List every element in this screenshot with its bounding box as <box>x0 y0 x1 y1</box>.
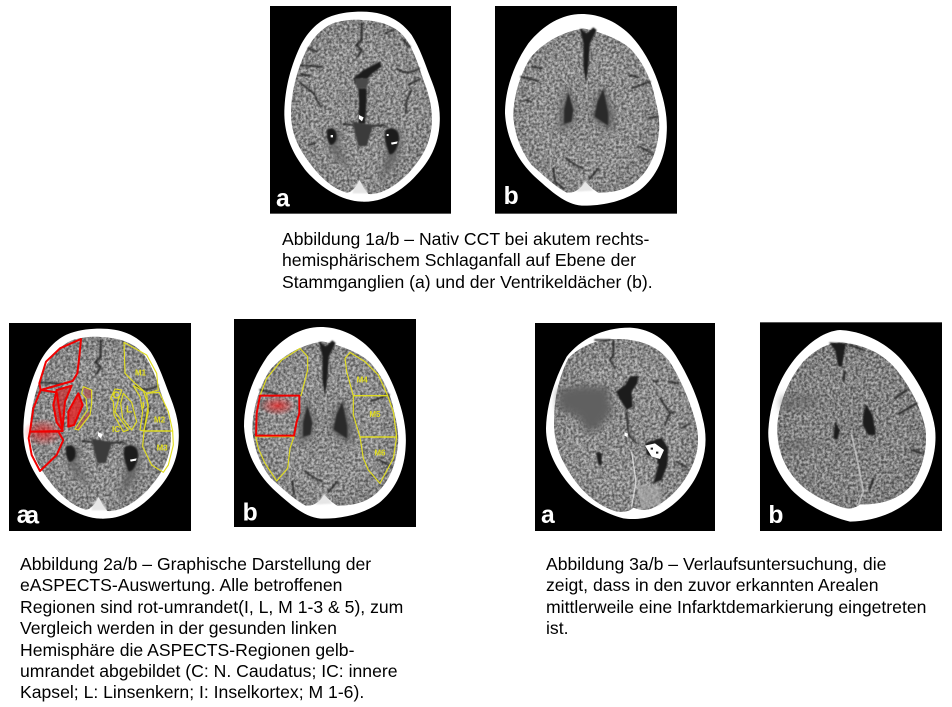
caption figure 3: Abbildung 3a/b – Verlaufsuntersuchung, die <box>546 554 886 574</box>
red outline M1 <box>39 339 81 390</box>
caption figure 2: Abbildung 2a/b – Graphische Darstellung der <box>20 554 371 574</box>
figure 3a: follow-up CT basal ganglia level <box>535 323 715 531</box>
caption figure 2: Regionen sind rot-umrandet(I, L, M 1-3 & 5), zum <box>20 597 403 617</box>
yellow ASPECTS regions left hemisphere: IC <box>112 425 120 434</box>
scan 2b <box>244 327 406 519</box>
red outline insula <box>53 386 72 430</box>
caption figure 1 <box>282 229 653 292</box>
brain 1a <box>291 20 432 194</box>
caption figure 1: Abbildung 1a/b – Nativ CCT bei akutem rechts- <box>282 229 649 249</box>
red outline M2 and M3 <box>29 390 63 471</box>
label b: b <box>504 183 519 210</box>
caption figure 2: Kapsel; L: Linsenkern; I: Inselkortex; M 1-6). <box>20 682 364 702</box>
scan 2a <box>23 329 179 519</box>
label b: b <box>243 499 258 526</box>
brain 3a <box>554 339 698 512</box>
yellow ASPECTS regions left hemisphere <box>111 342 173 472</box>
caption figure 1: hemisphärischem Schlaganfall auf Ebene der <box>282 250 636 270</box>
red outline M5 right hemisphere <box>256 396 299 436</box>
ventricles and sulci 3b <box>829 342 922 505</box>
figure 3b: follow-up CT ventricle roof level <box>760 322 942 531</box>
yellow ASPECTS regions left hemisphere: M3 <box>157 444 168 453</box>
ventricles and sulci 1a <box>300 23 419 193</box>
caption figure 2: umrandet abgebildet (C: N. Caudatus; IC: innere <box>20 661 398 681</box>
yellow regions M4 M5 M6 both hemispheres: M6 <box>374 449 386 458</box>
red outline lentiform nucleus <box>68 393 83 427</box>
yellow regions M4 M5 M6 both hemispheres <box>256 348 397 483</box>
label a: a <box>276 186 290 213</box>
caption figure 3: mittlerweile eine Infarktdemarkierung eingetreten <box>546 597 926 617</box>
label a: a <box>541 502 555 529</box>
figure 1b: CT ventricle roof level <box>495 6 677 214</box>
figure 1a: CT basal ganglia level <box>270 6 451 214</box>
caption figure 3 <box>546 554 926 638</box>
caption figure 1: Stammganglien (a) und der Ventrikeldächer (b). <box>282 272 653 292</box>
label a doubled: a <box>17 502 31 529</box>
caption figure 2: Hemisphäre die ASPECTS-Regionen gelb- <box>20 640 354 660</box>
brain 3b <box>777 342 926 508</box>
caption figure 2: Vergleich werden in der gesunden linken <box>20 618 337 638</box>
yellow ASPECTS regions left hemisphere: C <box>113 390 120 401</box>
yellow ASPECTS regions left hemisphere: M2 <box>154 416 166 425</box>
skull 1b <box>505 14 667 206</box>
label b: b <box>768 502 783 529</box>
yellow ASPECTS regions left hemisphere: L <box>126 405 132 416</box>
yellow ASPECTS regions left hemisphere: I <box>142 400 145 410</box>
hypodense patches 3b <box>780 395 820 450</box>
ventricles and sulci 1b <box>521 27 658 192</box>
yellow ASPECTS regions left hemisphere: M1 <box>135 368 147 377</box>
yellow outlined caudate and capsule right <box>75 387 92 430</box>
caption figure 2: eASPECTS-Auswertung. Alle betroffenen <box>20 575 342 595</box>
red haze M5 <box>259 396 296 416</box>
infarct hypodensity 3a <box>558 385 612 433</box>
caption figure 3: ist. <box>546 618 568 638</box>
caption figure 2 <box>20 554 403 702</box>
yellow regions M4 M5 M6 both hemispheres: M5 <box>369 410 381 419</box>
ventricles and sulci 3a <box>595 340 690 509</box>
figure 2a: eASPECTS regions basal ganglia level <box>9 323 191 531</box>
skull 3a <box>546 328 706 519</box>
yellow regions M4 M5 M6 both hemispheres: M4 <box>357 376 368 385</box>
skull 1a <box>284 12 440 202</box>
brain 1b <box>513 28 659 193</box>
label a overlay: a <box>25 503 39 530</box>
skull 3b <box>768 330 936 522</box>
figure 2b: eASPECTS regions ventricle roof level <box>234 319 416 527</box>
caption figure 3: zeigt, dass in den zuvor erkannten Arealen <box>546 575 879 595</box>
red affected hemisphere fills <box>23 386 92 446</box>
